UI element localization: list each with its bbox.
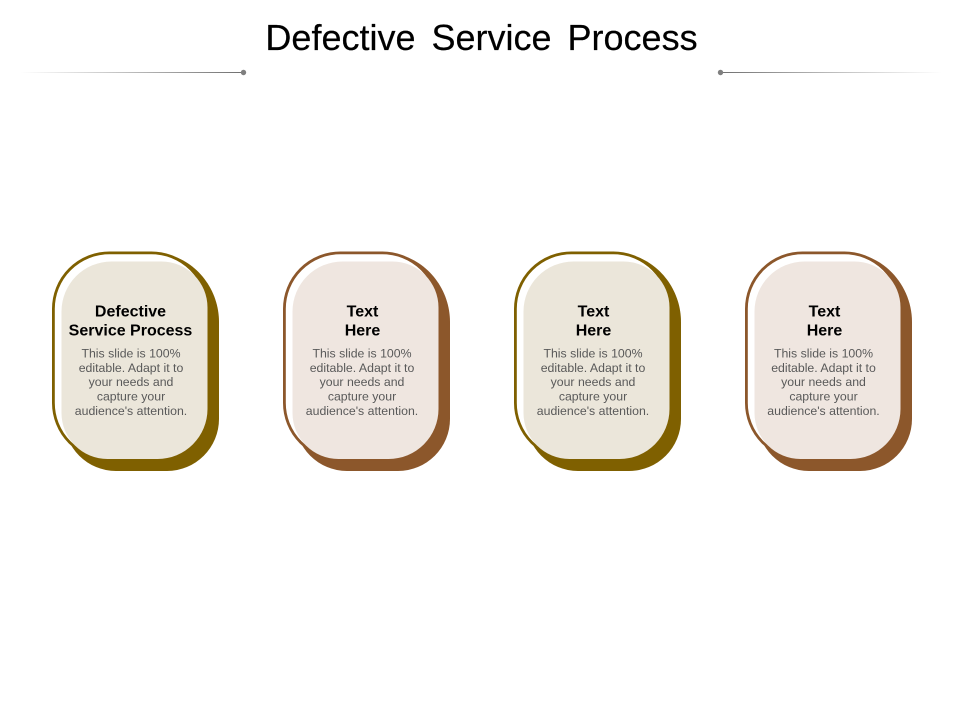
card 3 body: audience's attention. [537, 404, 649, 418]
card 1 body: editable. Adapt it to [79, 361, 183, 375]
card 2 body: audience's attention. [306, 404, 418, 418]
card 1 heading: Service Process [69, 322, 192, 340]
card 4 body: editable. Adapt it to [771, 361, 876, 375]
card 2 body: editable. Adapt it to [310, 361, 414, 375]
card 4 body: This slide is 100% [774, 347, 873, 361]
card 2 body: capture your [328, 390, 396, 404]
card 4 heading: Text [809, 304, 841, 320]
card 3 body: editable. Adapt it to [541, 361, 645, 375]
card 3 body: your needs and [551, 375, 636, 389]
card 3: Text Here [515, 252, 681, 471]
card 4: Text Here [746, 252, 912, 471]
right title rule [718, 70, 942, 75]
card 1 body: your needs and [89, 375, 174, 389]
title: Defective Service Process [265, 17, 698, 58]
card 1 body: audience's attention. [75, 404, 187, 418]
card 4 body: capture your [789, 390, 858, 404]
card 4 body: audience's attention. [767, 404, 880, 418]
card 3 heading: Here [576, 322, 611, 340]
card 4 body: your needs and [781, 375, 866, 389]
card 4 heading: Here [807, 322, 842, 340]
card 2: Text Here [284, 252, 450, 471]
card 2 heading: Text [347, 304, 379, 320]
card 1 body: This slide is 100% [81, 347, 181, 361]
card 1: Defective Service Process [53, 252, 219, 471]
card 1 heading: Defective [95, 304, 166, 320]
left title rule [20, 70, 246, 75]
card 2 body: This slide is 100% [312, 347, 412, 361]
card 2 body: your needs and [320, 375, 405, 389]
card 1 body: capture your [97, 390, 165, 404]
card 3 body: capture your [559, 390, 627, 404]
card 2 heading: Here [345, 322, 380, 340]
card 3 body: This slide is 100% [543, 347, 643, 361]
card 3 heading: Text [578, 304, 610, 320]
